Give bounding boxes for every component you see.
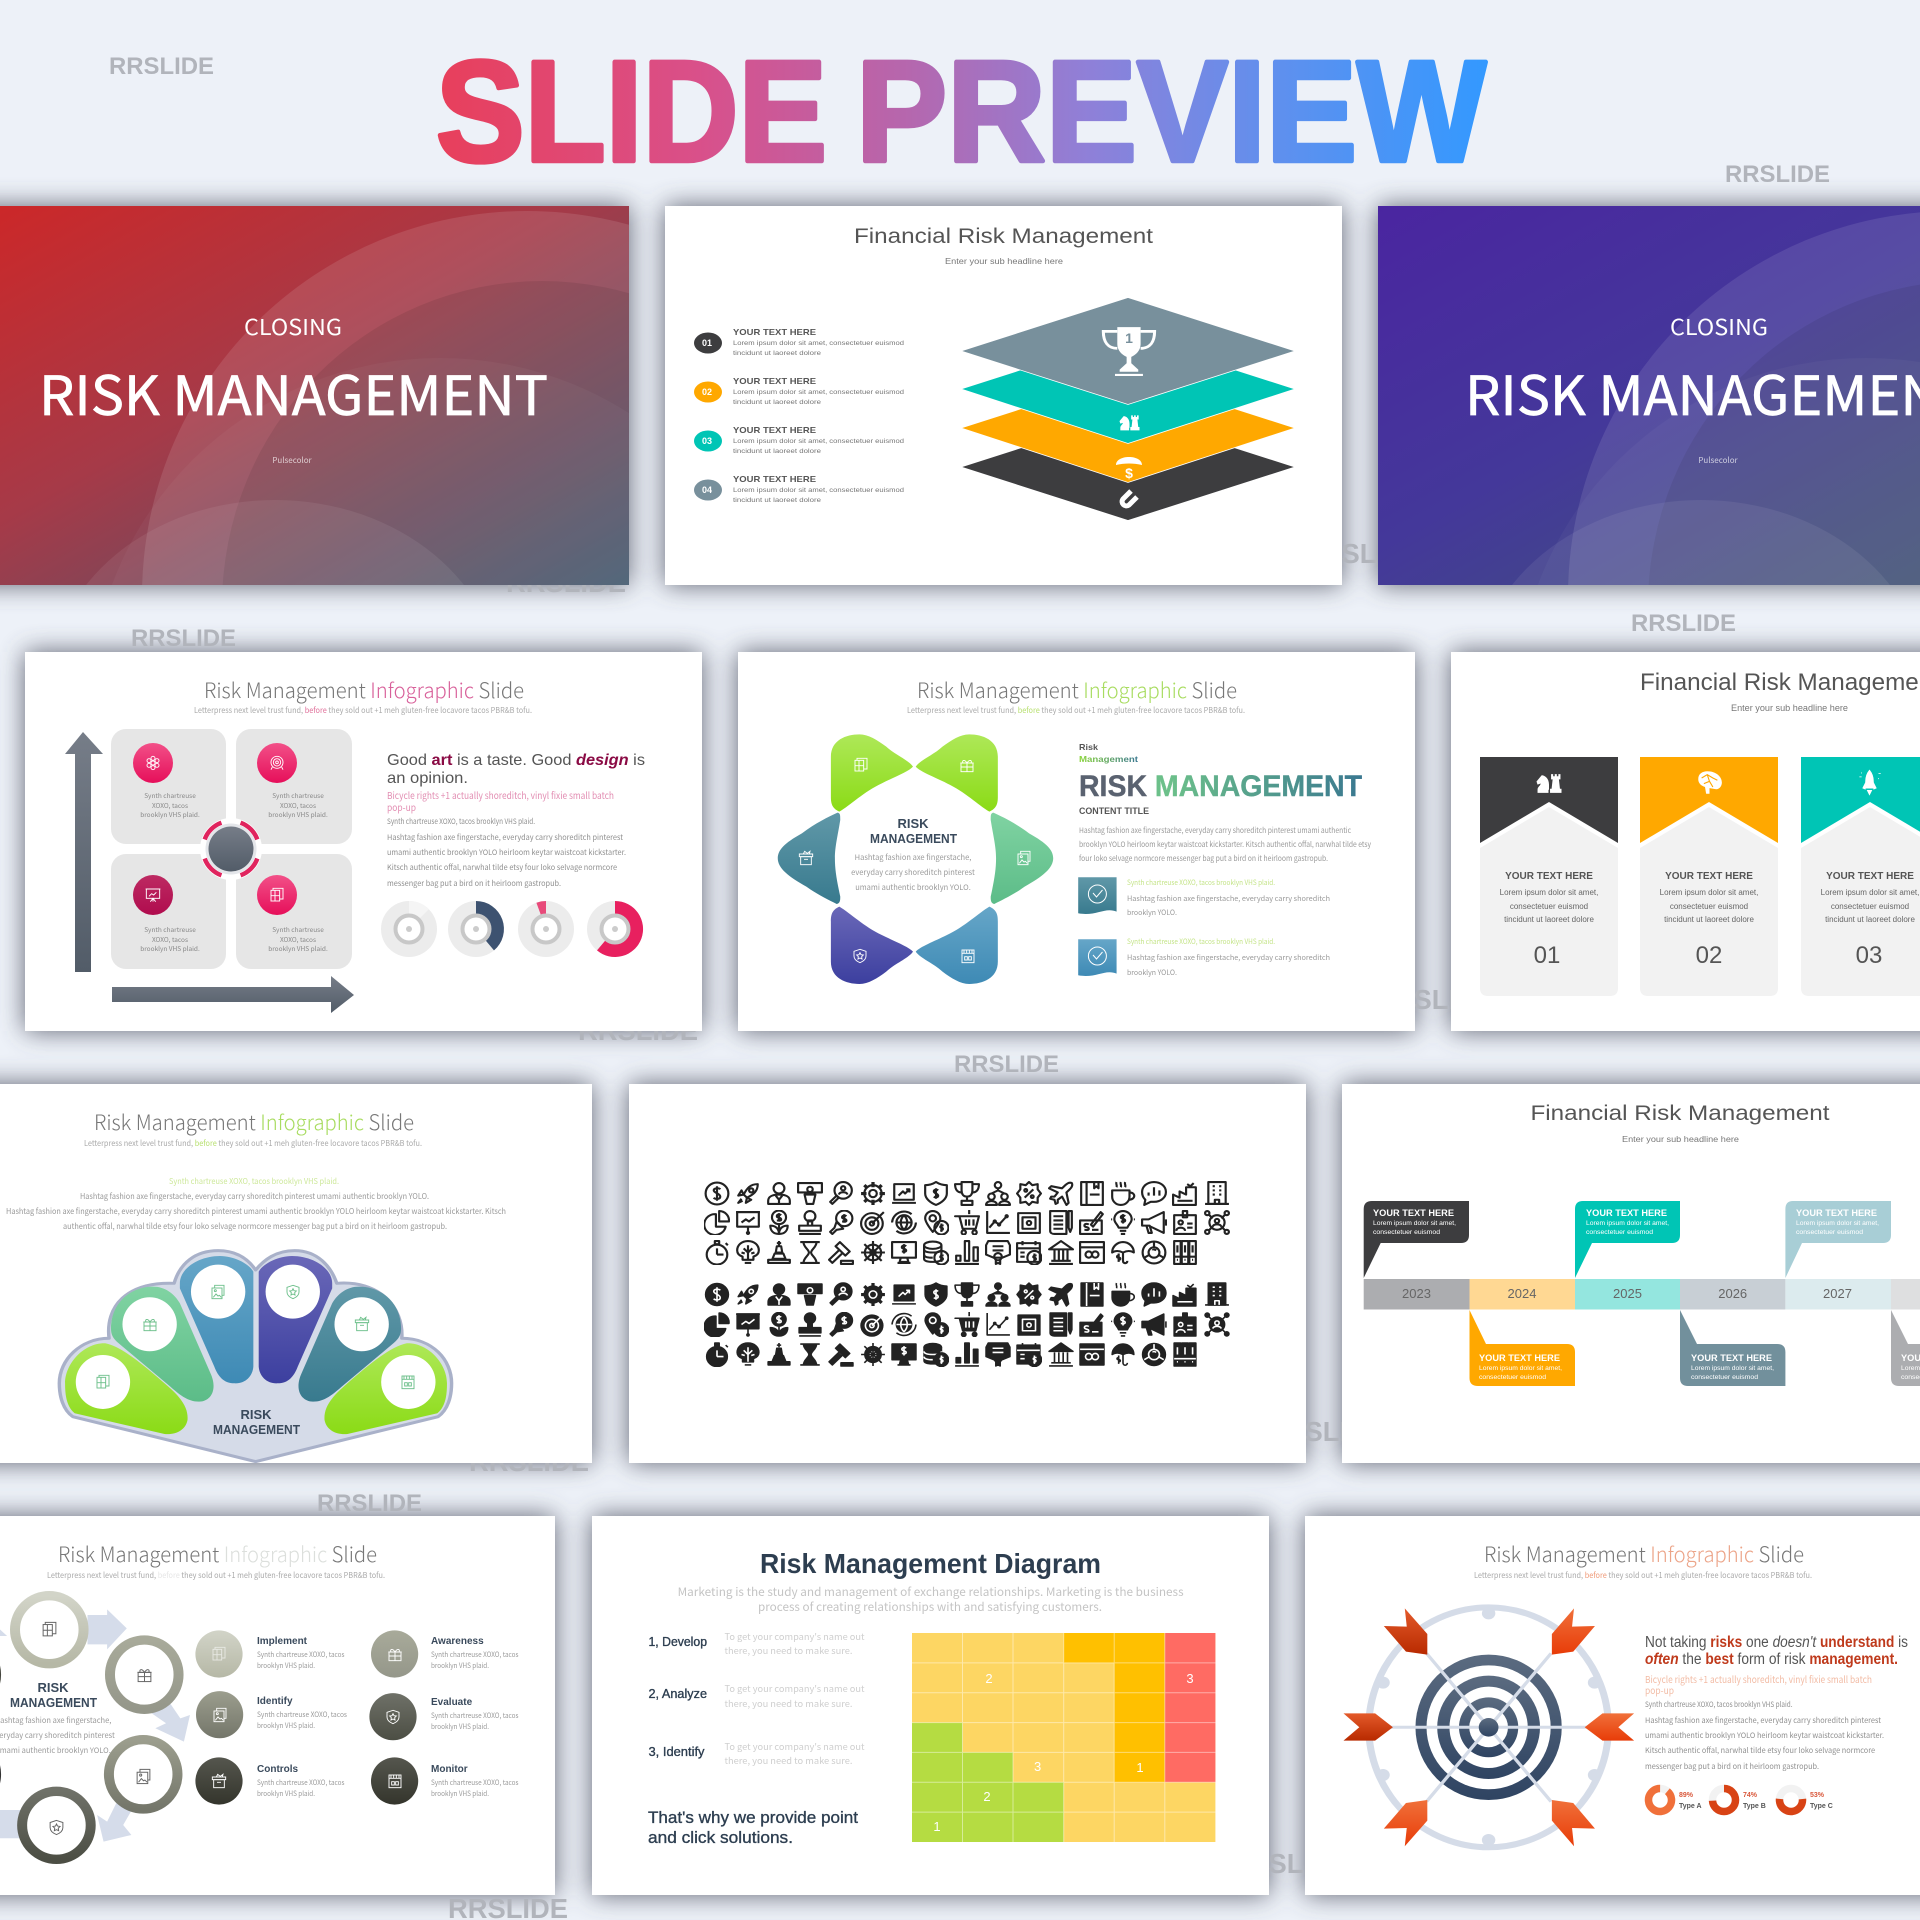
callout 2024: consectetuer euismod [1479, 1374, 1546, 1381]
risk matrix: 1 [1136, 1760, 1144, 1775]
card 02 [1640, 757, 1778, 996]
step labels: Synth chartreuse XOXO, tacos [257, 1650, 345, 1660]
card 02: 02 [1696, 942, 1722, 969]
risk matrix: 1 [933, 1819, 941, 1834]
watermarks: RRSLIDE [1265, 1416, 1385, 1447]
center label: MANAGEMENT [870, 831, 957, 846]
risk matrix: 2 [985, 1671, 993, 1686]
arrow: horizontal axis [112, 976, 354, 1013]
quadrant labels: Synth chartreuse [272, 790, 324, 800]
donut labels: Type C [1810, 1803, 1833, 1810]
closing text [1465, 310, 1920, 466]
numbered list: 03 [702, 436, 712, 446]
card 03 [1801, 757, 1920, 996]
numbered list: 02 [702, 387, 712, 397]
numbered list: 01 [702, 338, 712, 348]
callout 2027: consectetuer euismod [1796, 1229, 1863, 1236]
step labels: brooklyn VHS plaid. [257, 1661, 315, 1671]
sub heading: Letterpress next level trust fund, before they sold out +1 meh gluten-free locavore tacos PBR&B tofu. [1474, 1570, 1812, 1581]
callout 2027: Lorem ipsum dolor sit amet, [1796, 1220, 1879, 1227]
numbered list: tincidunt ut laoreet dolore [733, 497, 821, 504]
step labels: brooklyn VHS plaid. [431, 1661, 489, 1671]
risk matrix [912, 1633, 1215, 1842]
panel: closing slide red [0, 206, 629, 585]
callout 2027: YOUR TEXT HERE [1796, 1208, 1877, 1218]
body copy [387, 816, 626, 889]
card 01: Lorem ipsum dolor sit amet, [1500, 888, 1598, 897]
step labels: 3, Identify [648, 1745, 705, 1759]
paragraph [1079, 825, 1371, 864]
donut labels [1679, 1792, 1833, 1810]
badge text: brooklyn YOLO. [1127, 908, 1177, 918]
callout 2026: YOUR TEXT HERE [1691, 1353, 1772, 1363]
trophy number: 1 [1125, 330, 1133, 346]
badge text [1127, 878, 1330, 978]
step descriptions: there, you need to make sure. [724, 1754, 852, 1767]
donut labels: Type A [1679, 1803, 1702, 1810]
title [436, 31, 1486, 192]
body copy: Synth chartreuse XOXO, tacos brooklyn VHS plaid. [1645, 1699, 1792, 1710]
quadrant labels: XOXO, tacos [152, 800, 188, 810]
badge text: Synth chartreuse XOXO, tacos brooklyn VHS plaid. [1127, 937, 1275, 947]
step labels: brooklyn VHS plaid. [257, 1789, 315, 1799]
quadrant labels: brooklyn VHS plaid. [268, 809, 328, 819]
accent sentence: Bicycle rights +1 actually shoreditch, vinyl fixie small batch [387, 788, 614, 802]
center label: everyday carry shoreditch pinterest [851, 867, 975, 878]
sub heading: Enter your sub headline here [945, 257, 1064, 266]
step labels: 2, Analyze [648, 1687, 707, 1701]
watermarks: RRSLIDE [1302, 538, 1422, 569]
step labels: Implement [257, 1636, 308, 1647]
quote heading: Good art is a taste. Good design is [387, 752, 645, 769]
closing text: CLOSING [1670, 310, 1768, 342]
sub heading: Letterpress next level trust fund, before they sold out +1 meh gluten-free locavore tacos PBR&B tofu. [47, 1570, 385, 1581]
closing text [39, 310, 548, 466]
closing text: RISK MANAGEMENT [39, 352, 548, 431]
panel: quadrant infographic [25, 652, 702, 1031]
quadrant labels: brooklyn VHS plaid. [140, 809, 200, 819]
fan label: MANAGEMENT [213, 1422, 300, 1437]
closing statement: and click solutions. [648, 1828, 793, 1847]
numbered list: tincidunt ut laoreet dolore [733, 448, 821, 455]
quadrant labels: Synth chartreuse [144, 790, 196, 800]
body copy: Kitsch authentic offal, narwhal tilde etsy four loko selvage normcore [1645, 1745, 1875, 1756]
donut labels: Type B [1743, 1803, 1766, 1810]
card 03: Lorem ipsum dolor sit amet, [1821, 888, 1919, 897]
small label: Management [1079, 754, 1138, 764]
center label: RISK [897, 816, 929, 831]
timeline bar: 2024 [1508, 1286, 1536, 1301]
ring icons [43, 1622, 152, 1835]
body copy: Hashtag fashion axe fingerstache, everyday carry shoreditch pinterest [387, 832, 623, 843]
numbered list: 04 [702, 485, 712, 495]
card 03: YOUR TEXT HERE [1826, 871, 1914, 882]
fan shape [59, 1251, 452, 1462]
icon: chess [1120, 415, 1140, 430]
step labels: Evaluate [431, 1697, 473, 1708]
step descriptions: To get your company's name out [724, 1630, 865, 1643]
sub heading: Marketing is the study and management of exchange relationships. Marketing is the business [678, 1584, 1184, 1600]
accent sentence: pop-up [387, 800, 416, 814]
watermarks: RRSLIDE [1229, 1848, 1349, 1879]
callout 2026: consectetuer euismod [1691, 1374, 1758, 1381]
step labels: brooklyn VHS plaid. [431, 1722, 489, 1732]
accent sentence [387, 788, 614, 814]
quadrant icons [133, 743, 297, 915]
heading: Risk Management Infographic Slide [94, 1107, 414, 1137]
centered copy [6, 1176, 506, 1232]
accent sentence: Bicycle rights +1 actually shoreditch, vinyl fixie small batch [1645, 1672, 1872, 1686]
heading: Financial Risk Management [1530, 1102, 1830, 1125]
centered copy: authentic offal, narwhal tilde etsy four loko selvage normcore messenger bag put a bird on it heirloom gastropub. [63, 1221, 447, 1232]
accent sentence [1645, 1672, 1872, 1697]
numbered list: Lorem ipsum dolor sit amet, consectetuer euismod [733, 389, 904, 396]
numbered list: YOUR TEXT HERE [733, 376, 816, 386]
step descriptions [724, 1630, 865, 1767]
step labels: Synth chartreuse XOXO, tacos [431, 1650, 519, 1660]
card 03: tincidunt ut laoreet dolore [1825, 915, 1915, 924]
fan icons [97, 1285, 414, 1389]
outline icons [704, 1182, 1229, 1264]
numbered list: Lorem ipsum dolor sit amet, consectetuer euismod [733, 487, 904, 494]
step descriptions: To get your company's name out [724, 1682, 865, 1695]
body copy: messenger bag put a bird on it heirloom gastropub. [387, 878, 561, 889]
quadrant labels: brooklyn VHS plaid. [140, 943, 200, 953]
watermarks: RRSLIDE [1725, 161, 1830, 188]
watermarks: RRSLIDE [578, 1015, 698, 1046]
callout 2026: Lorem ipsum dolor sit amet, [1691, 1365, 1774, 1372]
timeline bar: 2027 [1823, 1286, 1852, 1301]
body copy: umami authentic brooklyn YOLO heirloom keytar waistcoat kickstarter. [387, 847, 626, 858]
title: PREVIEW [856, 31, 1486, 192]
timeline bar: 2023 [1402, 1286, 1431, 1301]
watermarks: RRSLIDE [1374, 984, 1494, 1015]
closing text: CLOSING [244, 310, 342, 342]
quadrant labels: Synth chartreuse [144, 924, 196, 934]
icon: umbrella dollar: $ [1125, 465, 1133, 481]
watermarks: RRSLIDE [469, 1446, 589, 1477]
callout 2023: YOUR TEXT HERE [1373, 1208, 1454, 1218]
heading: Risk Management Infographic Slide [1484, 1539, 1804, 1569]
step labels: Synth chartreuse XOXO, tacos [257, 1710, 348, 1720]
callout 2026 [1680, 1310, 1785, 1386]
sub heading: Enter your sub headline here [1622, 1135, 1740, 1144]
callout 2025: YOUR TEXT HERE [1586, 1208, 1667, 1218]
step labels: Identify [257, 1696, 293, 1707]
body copy: Hashtag fashion axe fingerstache, everyday carry shoreditch pinterest [1645, 1715, 1881, 1726]
accent sentence: pop-up [1645, 1683, 1674, 1697]
centered copy: Hashtag fashion axe fingerstache, everyday carry shoreditch pinterest umami authentic brooklyn YOLO heirloom keytar waistcoat kickstarter. Kitsch [6, 1206, 506, 1217]
process rings and arrows [0, 1596, 190, 1859]
numbered list [694, 327, 904, 504]
panel: financial risk layers [665, 206, 1342, 585]
step labels: Controls [257, 1764, 299, 1775]
filled icons [704, 1283, 1229, 1366]
donut labels: 74% [1743, 1792, 1758, 1799]
callout 2024: Lorem ipsum dolor sit amet, [1479, 1365, 1562, 1372]
body copy: messenger bag put a bird on it heirloom gastropub. [1645, 1761, 1819, 1772]
fan label [213, 1407, 300, 1437]
badge text: Hashtag fashion axe fingerstache, everyday carry shoreditch [1127, 953, 1330, 963]
fan label: RISK [240, 1407, 272, 1422]
center hub [200, 818, 262, 880]
quote heading [387, 752, 645, 787]
step labels: brooklyn VHS plaid. [257, 1721, 315, 1731]
quote heading: Not taking risks one doesn't understand is [1645, 1634, 1908, 1651]
centered copy: Synth chartreuse XOXO, tacos brooklyn VHS plaid. [169, 1176, 339, 1187]
risk matrix: 3 [1186, 1671, 1194, 1686]
step descriptions: there, you need to make sure. [724, 1697, 852, 1710]
callout 2025 [1575, 1201, 1680, 1278]
callout 2024 [1470, 1310, 1575, 1386]
watermarks: RRSLIDE [954, 1051, 1059, 1078]
paragraph: brooklyn YOLO heirloom keytar waistcoat kickstarter. Kitsch authentic offal, narwhal tilde etsy [1079, 839, 1371, 850]
step labels: Synth chartreuse XOXO, tacos [431, 1711, 519, 1721]
numbered list: Lorem ipsum dolor sit amet, consectetuer euismod [733, 340, 904, 347]
panel: six petal cycle [738, 652, 1415, 1031]
closing text: Pulsecolor [272, 455, 313, 466]
icon: magnet [1122, 491, 1137, 506]
body copy: Kitsch authentic offal, narwhal tilde etsy four loko selvage normcore [387, 862, 617, 873]
closing text: Pulsecolor [1698, 455, 1739, 466]
badge text: Synth chartreuse XOXO, tacos brooklyn VHS plaid. [1127, 878, 1275, 888]
heading: Risk Management Infographic Slide [917, 675, 1237, 705]
card 01: YOUR TEXT HERE [1505, 871, 1593, 882]
step labels: Awareness [431, 1636, 484, 1647]
timeline bar: 2025 [1613, 1286, 1642, 1301]
body copy: umami authentic brooklyn YOLO heirloom keytar waistcoat kickstarter. [1645, 1730, 1884, 1741]
sub heading: Letterpress next level trust fund, before they sold out +1 meh gluten-free locavore tacos PBR&B tofu. [84, 1138, 422, 1149]
body copy [1645, 1699, 1884, 1772]
content title: CONTENT TITLE [1079, 806, 1149, 817]
card 02: consectetuer euismod [1670, 902, 1748, 911]
numbered list: Lorem ipsum dolor sit amet, consectetuer euismod [733, 438, 904, 445]
step labels: 1, Develop [648, 1635, 707, 1649]
heading: Risk Management Diagram [760, 1548, 1101, 1579]
step labels: Monitor [431, 1764, 468, 1775]
step labels: brooklyn VHS plaid. [431, 1789, 489, 1799]
panel: financial risk cards [1451, 652, 1920, 1031]
center label: Hashtag fashion axe fingerstache, [855, 852, 971, 863]
callout 2023: consectetuer euismod [1373, 1229, 1440, 1236]
card 03: consectetuer euismod [1831, 902, 1909, 911]
body copy: Synth chartreuse XOXO, tacos brooklyn VHS plaid. [387, 816, 535, 827]
risk matrix: 2 [983, 1789, 991, 1804]
donut labels: 89% [1679, 1792, 1694, 1799]
numbered list: YOUR TEXT HERE [733, 425, 816, 435]
small label: Risk [1079, 742, 1098, 752]
heading: Risk Management Infographic Slide [58, 1539, 377, 1569]
badge text: brooklyn YOLO. [1127, 968, 1177, 978]
center label: RISK [37, 1680, 69, 1695]
centered copy: Hashtag fashion axe fingerstache, everyday carry shoreditch pinterest umami authentic brooklyn YOLO. [80, 1191, 429, 1202]
panel: risk diagram [592, 1516, 1269, 1895]
card 01 [1480, 757, 1618, 996]
quote heading: an opinion. [387, 770, 468, 787]
heading: Financial Risk Management [854, 225, 1153, 248]
panel: icon set [629, 1084, 1306, 1463]
donut labels: 53% [1810, 1792, 1825, 1799]
callout 2025: consectetuer euismod [1586, 1229, 1653, 1236]
panel: ring process [0, 1516, 555, 1895]
closing statement [648, 1808, 858, 1847]
card 02: tincidunt ut laoreet dolore [1664, 915, 1754, 924]
big heading: RISK MANAGEMENT [1079, 770, 1362, 803]
sub heading: process of creating relationships with and satisfying customers. [758, 1599, 1102, 1615]
step descriptions: there, you need to make sure. [724, 1644, 852, 1657]
panel: closing slide purple [1378, 206, 1920, 585]
panel: fan diagram [0, 1084, 592, 1463]
callout 2023: Lorem ipsum dolor sit amet, [1373, 1220, 1456, 1227]
center label: umami authentic brooklyn YOLO. [855, 882, 971, 893]
sub heading [678, 1584, 1184, 1615]
center label [0, 1680, 115, 1756]
center label [851, 816, 975, 893]
closing statement: That's why we provide point [648, 1808, 858, 1827]
quadrant labels: brooklyn VHS plaid. [268, 943, 328, 953]
decorative arcs [50, 211, 912, 1054]
step labels: Synth chartreuse XOXO, tacos [257, 1778, 345, 1788]
panel: timeline [1342, 1084, 1920, 1463]
card 03: 03 [1856, 942, 1882, 969]
petal ring [778, 734, 1053, 984]
quote heading [1645, 1634, 1908, 1668]
timeline bar [1364, 1279, 1920, 1310]
sub heading: Letterpress next level trust fund, before they sold out +1 meh gluten-free locavore tacos PBR&B tofu. [907, 705, 1245, 716]
panel: target infographic [1305, 1516, 1920, 1895]
arrow: vertical axis [65, 732, 103, 972]
watermarks: RRSLIDE [131, 625, 236, 652]
card 01: consectetuer euismod [1510, 902, 1588, 911]
callout 2027 [1785, 1201, 1891, 1278]
sub heading: Enter your sub headline here [1731, 703, 1848, 713]
quadrant labels: Synth chartreuse [272, 924, 324, 934]
stacked diamond layers [961, 298, 1295, 520]
card 01: 01 [1534, 942, 1560, 969]
callout 2024: YOUR TEXT HERE [1479, 1353, 1560, 1363]
center label: MANAGEMENT [10, 1695, 97, 1710]
quadrant labels: XOXO, tacos [152, 934, 188, 944]
numbered list: tincidunt ut laoreet dolore [733, 399, 821, 406]
target with arrows [1343, 1607, 1634, 1847]
timeline bar: 2026 [1718, 1286, 1747, 1301]
card 02: Lorem ipsum dolor sit amet, [1660, 888, 1758, 897]
quadrant labels: XOXO, tacos [280, 934, 316, 944]
numbered list: YOUR TEXT HERE [733, 327, 816, 337]
decorative arcs [1476, 211, 1920, 1054]
step labels [648, 1635, 707, 1759]
callout 2028 [1891, 1310, 1920, 1386]
callout 2025: Lorem ipsum dolor sit amet, [1586, 1220, 1669, 1227]
donut charts [381, 901, 643, 957]
step descriptions: To get your company's name out [724, 1740, 865, 1753]
paragraph: Hashtag fashion axe fingerstache, everyday carry shoreditch pinterest umami authentic [1079, 825, 1351, 836]
check badges [1078, 877, 1117, 976]
badge text: Hashtag fashion axe fingerstache, everyday carry shoreditch [1127, 894, 1330, 904]
step circles [195, 1630, 418, 1805]
card 02: YOUR TEXT HERE [1665, 871, 1753, 882]
sub heading: Letterpress next level trust fund, before they sold out +1 meh gluten-free locavore tacos PBR&B tofu. [194, 705, 532, 716]
numbered list: YOUR TEXT HERE [733, 474, 816, 484]
watermarks: RRSLIDE [506, 567, 626, 598]
step labels [257, 1636, 519, 1799]
quadrant labels: XOXO, tacos [280, 800, 316, 810]
paragraph: four loko selvage normcore messenger bag put a bird on it heirloom gastropub. [1079, 853, 1328, 864]
quadrant labels [140, 790, 328, 953]
small label [1079, 742, 1138, 764]
title: SLIDE [436, 31, 827, 192]
watermarks: RRSLIDE [317, 1490, 422, 1517]
heading: Risk Management Infographic Slide [204, 675, 524, 705]
risk matrix: 3 [1034, 1759, 1041, 1774]
icon: umbrella dollar [1116, 457, 1142, 481]
card 01: tincidunt ut laoreet dolore [1504, 915, 1594, 924]
icon: trophy [1103, 327, 1155, 376]
quadrant cards [111, 729, 352, 969]
watermarks: RRSLIDE [1631, 610, 1736, 637]
quote heading: often the best form of risk management. [1645, 1651, 1898, 1668]
step labels: Synth chartreuse XOXO, tacos [431, 1778, 519, 1788]
petal icons [799, 758, 1030, 963]
callout 2023 [1364, 1201, 1469, 1278]
watermarks: RRSLIDE [109, 53, 214, 80]
numbered list: tincidunt ut laoreet dolore [733, 350, 821, 357]
mini donuts [1644, 1784, 1803, 1816]
